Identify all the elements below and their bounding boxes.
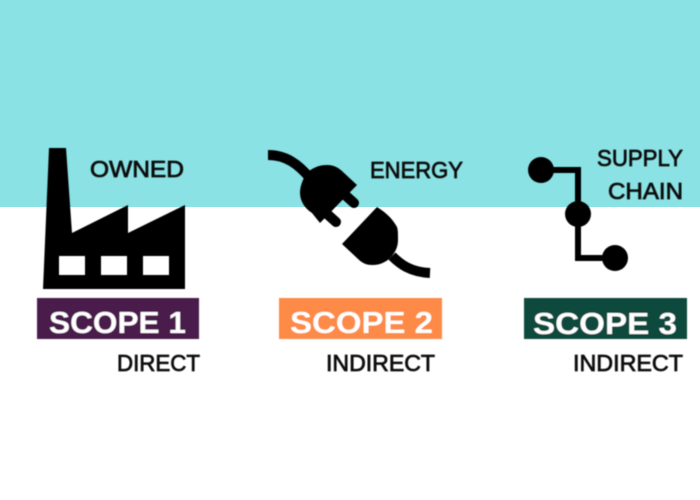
label: indirect: INDIRECT	[326, 350, 435, 376]
label: chain: CHAIN	[608, 178, 683, 204]
panel: scope 3	[524, 145, 687, 376]
icon: plug	[268, 155, 430, 273]
badge: scope 1: SCOPE 1	[49, 305, 186, 340]
icon: factory	[43, 148, 185, 289]
badge: scope 2: SCOPE 2	[290, 305, 433, 340]
icon: supply chain nodes	[528, 157, 628, 271]
label: energy: ENERGY	[370, 157, 463, 183]
badge: scope 1	[37, 298, 199, 340]
label: indirect: INDIRECT	[573, 350, 683, 376]
badge: scope 3: SCOPE 3	[533, 306, 677, 341]
label: owned: OWNED	[90, 156, 184, 182]
background: teal band	[0, 0, 700, 207]
panel: scope 2	[268, 155, 463, 376]
badge: scope 3	[524, 298, 687, 341]
badge: scope 2	[279, 298, 442, 340]
panel: scope 1	[37, 148, 200, 376]
label: supply: SUPPLY	[597, 145, 683, 171]
label: direct: DIRECT	[117, 350, 200, 376]
